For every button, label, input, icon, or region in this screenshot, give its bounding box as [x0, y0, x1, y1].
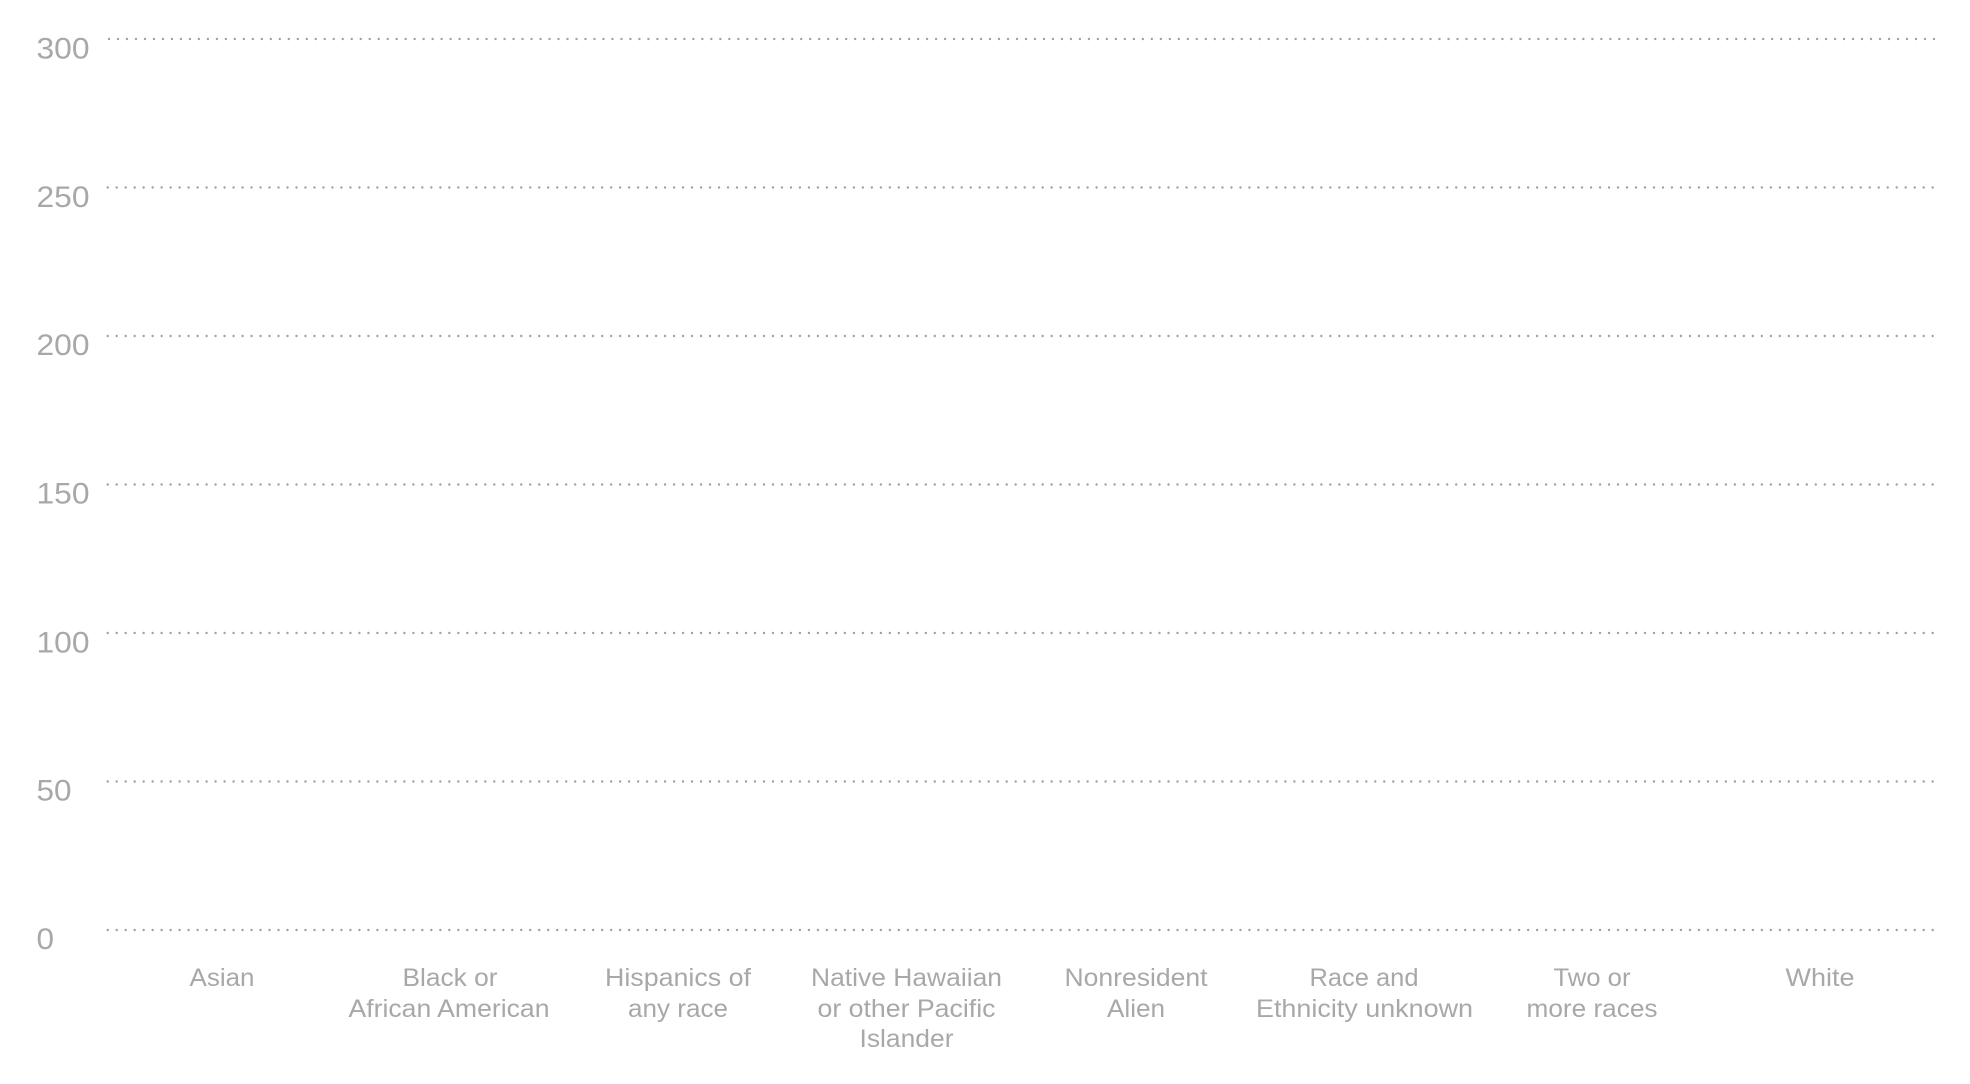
- x-axis label: Native Hawaiian or other Pacific Islander: or other Pacific: [818, 995, 996, 1023]
- y-axis labels: 0: [36, 923, 54, 956]
- x-axis label: Native Hawaiian or other Pacific Islander: [811, 964, 1002, 1053]
- x-axis label: Race and Ethnicity unknown: [1256, 964, 1473, 1023]
- x-axis label: White: White: [1786, 964, 1854, 992]
- x-axis label: Two or more races: [1526, 964, 1658, 1023]
- x-axis label: Two or more races: more races: [1526, 995, 1658, 1023]
- y-axis labels: 50: [36, 774, 72, 808]
- x-axis label: Hispanics of any race: Hispanics of: [605, 964, 751, 992]
- y-axis labels: 250: [36, 181, 90, 214]
- y-axis labels: 300: [36, 32, 90, 66]
- x-axis label: Nonresident Alien: Nonresident: [1064, 964, 1208, 992]
- x-axis label: Hispanics of any race: [605, 964, 751, 1023]
- x-axis label: Two or more races: Two or: [1554, 964, 1630, 992]
- x-axis label: Hispanics of any race: any race: [628, 995, 728, 1023]
- x-axis label: Nonresident Alien: Alien: [1107, 995, 1165, 1023]
- y-axis labels: [36, 32, 90, 956]
- x-axis label: Black or African American: [348, 964, 550, 1023]
- x-axis label: Race and Ethnicity unknown: Race and: [1310, 964, 1418, 992]
- x-axis label: Black or African American: Black or: [402, 964, 498, 992]
- x-axis label: Asian: Asian: [190, 964, 254, 992]
- y-axis labels: 150: [36, 478, 90, 510]
- x-axis label: Black or African American: African American: [348, 995, 550, 1023]
- y-axis labels: 200: [36, 329, 90, 362]
- x-axis label: Native Hawaiian or other Pacific Islander: Native Hawaiian: [811, 964, 1002, 992]
- gridlines: [108, 39, 1935, 930]
- x-axis label: Race and Ethnicity unknown: Ethnicity unknown: [1256, 995, 1473, 1023]
- x-axis label: Native Hawaiian or other Pacific Islander: Islander: [860, 1025, 954, 1053]
- y-axis labels: 100: [36, 626, 90, 660]
- x-axis label: Nonresident Alien: [1064, 964, 1208, 1023]
